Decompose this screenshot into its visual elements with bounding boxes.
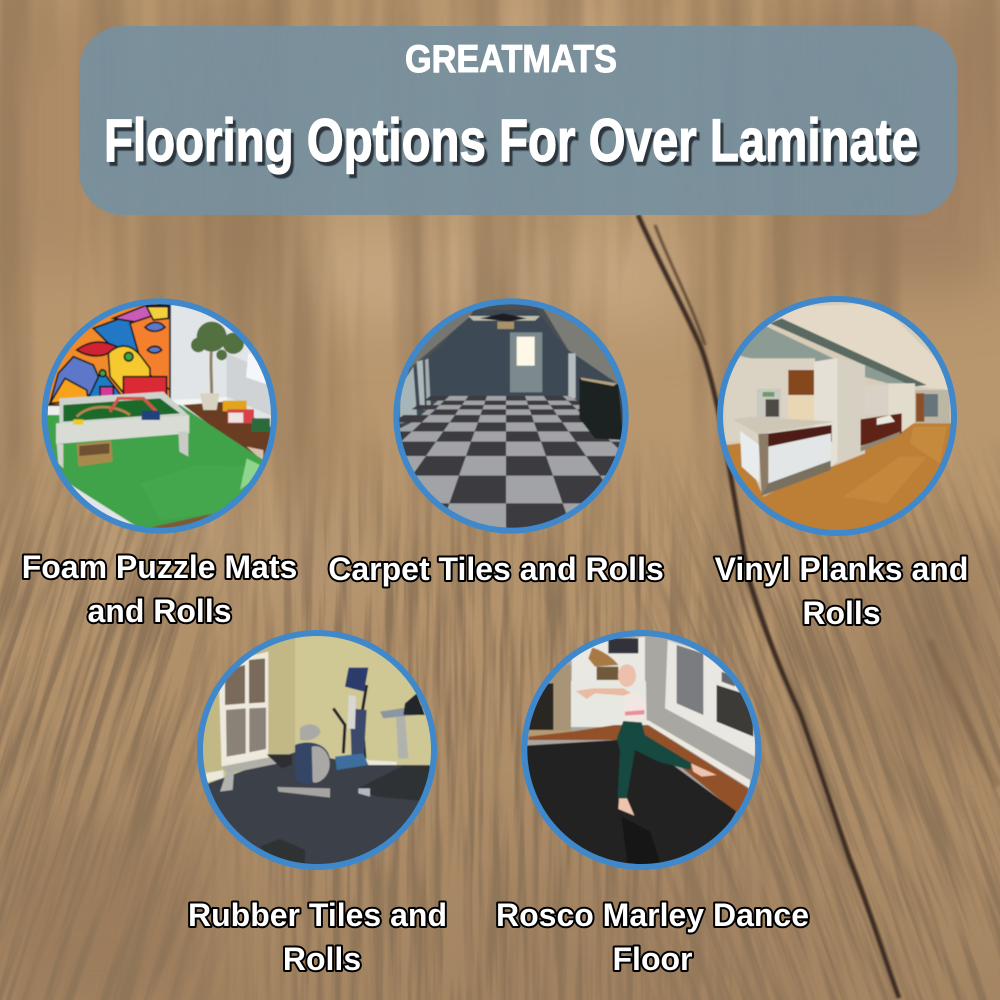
header panel <box>79 26 957 215</box>
left wall cutouts <box>400 367 417 423</box>
wood floor <box>183 401 270 458</box>
dresser <box>579 377 623 440</box>
door and window <box>510 332 542 392</box>
label: Rubber Tiles and Rolls: Rubber Tiles and <box>188 897 447 933</box>
wood floor <box>528 725 748 812</box>
carpet floor light <box>400 395 620 528</box>
wood floor <box>726 422 951 530</box>
window frames <box>665 640 755 757</box>
baseboard <box>648 720 750 788</box>
label: Rosco Marley Dance Floor: Floor <box>613 941 692 977</box>
mural <box>48 304 171 406</box>
wall <box>646 680 649 721</box>
black marley <box>525 740 737 872</box>
rower <box>221 753 290 773</box>
baseboard <box>206 770 223 782</box>
ceiling fan <box>480 313 527 322</box>
elliptical <box>277 787 330 798</box>
far corridor <box>865 385 888 415</box>
center pillar <box>814 358 838 467</box>
back wall left <box>725 358 815 442</box>
photo: rubber tiles home gym <box>197 628 440 872</box>
side wall and window <box>227 353 273 417</box>
shutters <box>218 652 268 768</box>
photo: carpet tiles attic room <box>393 298 629 534</box>
label: Rosco Marley Dance Floor: Rosco Marley Dance <box>496 897 809 933</box>
bookcase and cabinets <box>572 637 645 682</box>
ceiling tiles <box>777 303 953 390</box>
logo: GREATMATS: GREATMATS <box>405 38 617 81</box>
photo: foam puzzle mats playroom <box>40 297 280 537</box>
glass soffit left <box>740 326 833 362</box>
photo: vinyl planks corridor <box>713 293 967 540</box>
label: Rubber Tiles and Rolls: Rolls <box>283 941 361 977</box>
wooden crate <box>77 441 113 467</box>
ceiling slopes <box>408 304 567 374</box>
baseboard <box>170 397 227 405</box>
tree and pot <box>209 350 214 394</box>
green mat <box>43 405 263 535</box>
play table <box>59 392 188 423</box>
label: Vinyl Planks and Rolls: Rolls <box>802 595 881 631</box>
photo: rosco marley dance floor <box>522 628 762 872</box>
dark counter far <box>861 413 902 446</box>
treadmill <box>380 705 423 718</box>
label: Vinyl Planks and Rolls: Vinyl Planks and <box>715 551 968 587</box>
toy trucks <box>223 401 247 411</box>
carpet dark squares <box>400 395 622 528</box>
label: Foam Puzzle Mats and Rolls: and Rolls <box>87 593 232 629</box>
bench <box>260 839 305 865</box>
reception desk <box>733 417 835 434</box>
label: Carpet Tiles and Rolls: Carpet Tiles and Rolls <box>328 551 664 587</box>
dancer <box>576 648 717 816</box>
rubber floor <box>208 752 430 864</box>
label: Foam Puzzle Mats and Rolls: Foam Puzzle Mats <box>22 549 297 585</box>
